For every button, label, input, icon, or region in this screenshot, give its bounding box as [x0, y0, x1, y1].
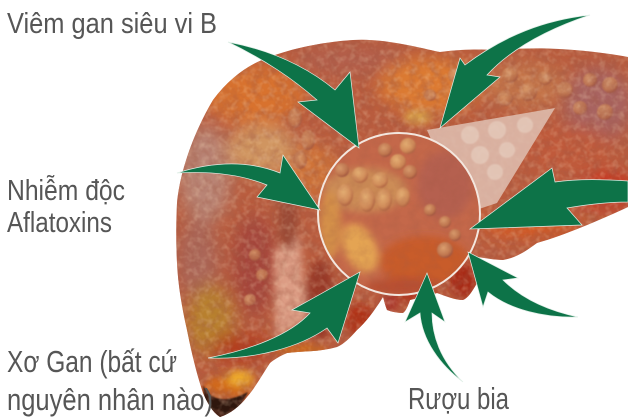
arrow: Rượu bia [405, 273, 463, 382]
mottled surface texture [170, 30, 628, 419]
translucent magnifier beam [427, 108, 555, 212]
label: Xơ Gan (bất cứ nguyên nhân nào): Xơ Gan (bất cứ [7, 344, 177, 379]
label: Rượu bia: Rượu bia [408, 381, 510, 416]
surface nodules [244, 67, 618, 306]
liver illustration [170, 30, 628, 419]
arrow: Xơ Gan [208, 272, 360, 358]
label: Viêm gan siêu vi B: Viêm gan siêu vi B [7, 8, 217, 40]
arrows [177, 15, 628, 382]
arrow: Nhiễm độc Aflatoxins [177, 155, 320, 210]
liver nodules in lens [335, 138, 461, 258]
label: Nhiễm độc Aflatoxins [7, 174, 125, 239]
label: Nhiễm độc Aflatoxins: Aflatoxins [7, 207, 112, 239]
beam nodules [461, 117, 533, 180]
label: Xơ Gan (bất cứ nguyên nhân nào) [7, 344, 213, 417]
arrow: right [470, 168, 628, 229]
magnified circle lens [318, 133, 480, 296]
arrow: lower right [468, 252, 578, 317]
arrow: top right [440, 15, 590, 128]
dark tip of the left lobe [203, 385, 248, 419]
arrow: Viêm gan siêu vi B [228, 42, 359, 148]
label: Xơ Gan (bất cứ nguyên nhân nào): nguyên nhân nào) [7, 382, 213, 417]
lens ring [318, 133, 480, 295]
label: Nhiễm độc Aflatoxins: Nhiễm độc [7, 174, 125, 207]
pale fold [274, 235, 310, 338]
